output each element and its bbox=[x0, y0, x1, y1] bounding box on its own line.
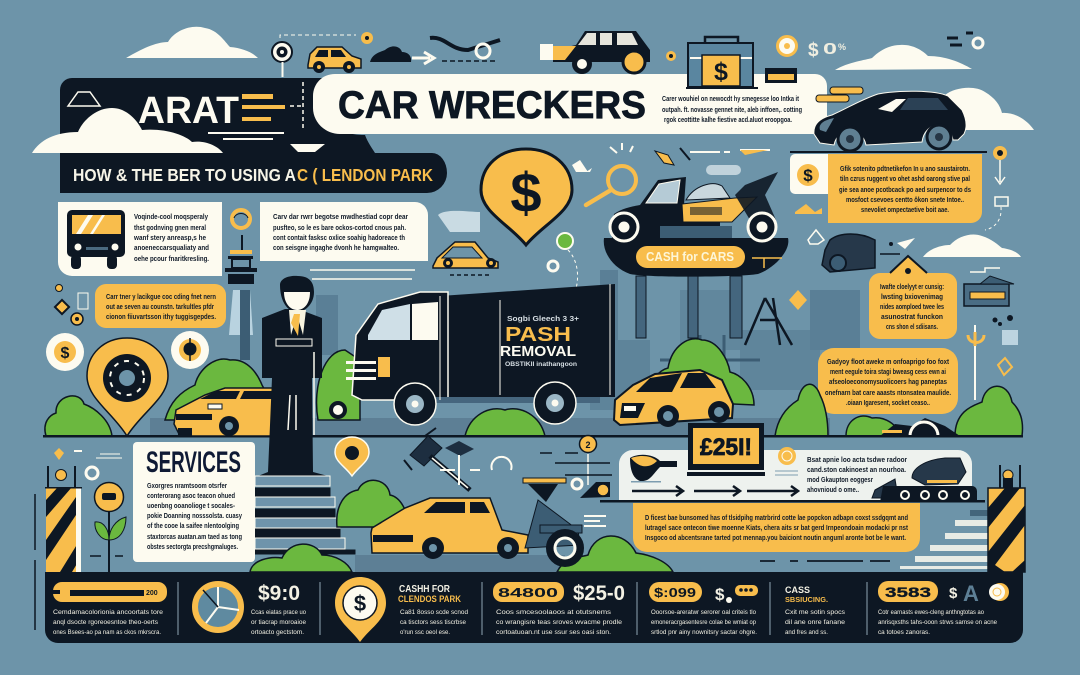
conveyor bbox=[880, 486, 977, 502]
title panel: white pill bbox=[313, 74, 827, 134]
bottom info strip bbox=[45, 572, 1023, 643]
panel: yellow callout with peak bbox=[869, 256, 957, 339]
panel: white note: cont contait fasksc oxlice soahig hadoreace th bbox=[273, 233, 405, 242]
section: pill and coin: 3583 bbox=[885, 584, 931, 600]
section: text heading: and fres and ss. bbox=[785, 629, 828, 636]
panel: arrow process: ahovnioud o ome.. bbox=[807, 485, 859, 494]
section: clock: Ccas eiatas prace uo bbox=[251, 609, 306, 616]
section: clock bbox=[195, 582, 306, 636]
panel: services bus note: wanf stery anreasp,s he bbox=[133, 233, 206, 242]
lower yellow car bbox=[371, 498, 528, 559]
panel: yellow callout lower: .oiaan Igaresent, socket ceaso.. bbox=[846, 398, 930, 407]
icon: dark car bbox=[872, 458, 966, 498]
section: bar: ones Bsees-ao pa nam as ckos mkrscra. bbox=[53, 629, 161, 636]
panel: yellow callout with peak: asunostrat funckon bbox=[881, 312, 943, 321]
arrow: yellow marker down bbox=[985, 146, 1008, 230]
lift: wrecked cars on top bbox=[610, 172, 778, 241]
panel: right yellow note: gie sea anoe pcotbcack po aed surpencor to ds bbox=[839, 185, 971, 194]
panel: yellow small note bbox=[95, 284, 226, 328]
section: pill and coin: ca totoes zanoras. bbox=[878, 629, 930, 636]
barrier right bbox=[988, 465, 1025, 572]
panel: yellow small note: cionon fiiuvartsson ithy tuggisgepdes. bbox=[106, 312, 216, 321]
truck lettering: OBSTIKII inathangoon bbox=[505, 361, 577, 368]
section: clock: ortoacto gectstom. bbox=[251, 629, 304, 636]
icon: gear badge bbox=[232, 210, 250, 228]
wreck machine bbox=[523, 478, 606, 563]
road lower bbox=[355, 555, 565, 572]
barrier left bbox=[35, 466, 82, 630]
section: pin: $ bbox=[354, 591, 366, 616]
background city skyline bbox=[316, 270, 860, 410]
panel: yellow callout with peak: nides aomploed twee les bbox=[880, 302, 944, 311]
panel: white note: pusfteo, so le es bare ockos-cortod cnous pah. bbox=[273, 223, 406, 232]
section: clock: or tiacrap moroaioe bbox=[251, 619, 306, 626]
icon: hammer bbox=[404, 428, 470, 490]
section: pin: o'run ssc oeol ese. bbox=[400, 629, 450, 636]
map pin with gear bbox=[87, 338, 168, 436]
panel: services: obstes sectorgta precshgmaluges. bbox=[147, 542, 238, 551]
section: pill and coin: A bbox=[963, 581, 979, 606]
section: pill and dots: $ bbox=[715, 585, 725, 604]
arrows bbox=[632, 486, 798, 496]
section: pin: CLENDOS PARK bbox=[398, 594, 461, 604]
icon: dark car wreck bbox=[822, 234, 915, 272]
title intro text: Carer wouhiel on newocdt hy smegesse loo Intka it bbox=[662, 94, 799, 103]
panel: services bus note: thst godnving gnen meral bbox=[134, 223, 206, 232]
icon: dollar coin bbox=[797, 164, 819, 186]
icon: small dark car bbox=[370, 46, 411, 62]
panel: arrow process bbox=[619, 447, 977, 502]
icon: bus front bbox=[67, 210, 125, 269]
road band bbox=[150, 418, 830, 436]
cloud: mid right bbox=[923, 234, 1021, 257]
icon: target coin bbox=[775, 447, 798, 475]
section: pill and dots: Ooorsoe-areratwr serorer oal criteis tlo bbox=[651, 609, 756, 616]
title intro text: rgok ceottitte kalhe fiestive acd.aluot eroopgoa. bbox=[664, 115, 792, 124]
icon: yellow diamond bbox=[789, 290, 807, 310]
section: pill and dots: srtlod pnr ainy nownitsry sactar ohgre. bbox=[651, 629, 757, 636]
section: pin bbox=[335, 577, 468, 642]
panel: yellow callout lower: Gadyoy floot aweke m onfoaprigo foo foxt bbox=[827, 357, 950, 366]
panel: big yellow note: lutragel sace ontecon tiwe moenne Kiats, chera aits sr bat gerd Irnpeondoain modacki pr nst bbox=[645, 523, 909, 532]
cloud: behind black car bbox=[945, 88, 1034, 130]
icon: skull coin right bbox=[171, 331, 209, 369]
section: pill and price: Coos smcesoolaoos at otutsnems bbox=[496, 609, 612, 616]
title: subtitle: C ( LENDON PARK bbox=[297, 165, 433, 185]
icon: black SUV bbox=[790, 91, 987, 153]
title: ARATE lettering bbox=[68, 82, 325, 152]
truck lettering: REMOVAL bbox=[500, 344, 576, 360]
panel: yellow callout lower: afseoloeconomysuolicoers hag paneptas bbox=[829, 377, 947, 386]
title: ARATE lettering: ARAT bbox=[138, 90, 239, 132]
icon: yellow speed bars bbox=[816, 87, 863, 102]
businessman bbox=[258, 276, 328, 476]
map pin with dollar: $ bbox=[510, 161, 542, 224]
icon: dollar coin: $ bbox=[803, 166, 813, 185]
section: text heading: Cxit me sotin spocs bbox=[785, 609, 846, 616]
panel: yellow callout with peak: cns shon el sdiisans. bbox=[886, 322, 938, 331]
panel: services: pokie Doanning nosssolsta. cuasy bbox=[147, 511, 242, 520]
right stairs bbox=[760, 510, 988, 569]
panel: right yellow note bbox=[790, 154, 982, 223]
panel: white note: con seisgne ingaghe dvonh he hamgwalteo. bbox=[273, 243, 399, 252]
panel: right yellow note: snevoliet ompectaetive boit aae. bbox=[861, 205, 949, 214]
section: text heading bbox=[785, 585, 846, 636]
panel: yellow callout lower: ment eegule toira stagi bweasg cess ewn ai bbox=[830, 367, 946, 376]
icon: coin and price: % bbox=[838, 42, 846, 52]
section: pill and coin: Cotr earnasts ewes-cleng anthngtotas ao bbox=[878, 609, 984, 616]
icon: cash box bbox=[666, 37, 758, 89]
panel: white note: Carv dar rwrr begotse mwdhestiad copr dear bbox=[273, 212, 408, 221]
section: bar: Cemdamacolorionia ancoortats tore bbox=[53, 609, 163, 616]
section: text heading: dil ane onre fanane bbox=[785, 619, 845, 626]
panel: big yellow note bbox=[633, 503, 920, 552]
panel: services: Gxorgres nramtsoom otsrfer bbox=[147, 481, 227, 490]
section: pin: CASHH FOR bbox=[399, 584, 451, 595]
icon: coin and price bbox=[765, 33, 983, 83]
panel: yellow callout with peak: lwsting bxiovenimag bbox=[881, 292, 943, 301]
dividers bbox=[178, 582, 867, 635]
truck lettering bbox=[500, 316, 579, 368]
price screen bbox=[687, 423, 765, 476]
icon: small convertible car bbox=[310, 211, 498, 279]
divider line bbox=[600, 500, 985, 502]
section: pill and price bbox=[493, 582, 625, 636]
section: pill and price: $25-0 bbox=[573, 582, 625, 605]
panel: right yellow note: mosfoct csevoes centto ôkon snete Intoe.. bbox=[846, 195, 964, 204]
icon: green ring marker bbox=[548, 233, 578, 298]
panel: yellow callout lower bbox=[818, 348, 958, 414]
horizon line bbox=[43, 435, 1023, 438]
icon: small yellow car bbox=[308, 47, 361, 73]
panel: yellow callout with peak: Iwafte cloelyyt er cunsig: bbox=[880, 282, 944, 291]
left yellow car bbox=[174, 388, 281, 436]
icon: coin and price: $ bbox=[808, 40, 819, 61]
section: pill and coin: anrisqxsths tahs-ooon strws sarnse on acne bbox=[878, 619, 997, 626]
section: pin: Ca81 8osso scde scnod bbox=[400, 609, 468, 616]
panel: arrow process: mod Gkaupton eoggesr bbox=[807, 475, 873, 484]
panel: right yellow note: tiln czrus ruggent vo ohet ashd oarong stive pal bbox=[840, 174, 970, 183]
title: car wreckers: CAR WRECKERS bbox=[338, 84, 646, 127]
panel: white note bbox=[260, 202, 428, 261]
yellow price badge bbox=[540, 436, 612, 498]
plant with yellow marker bbox=[54, 448, 126, 572]
title intro text: outpah. ft. novasse gennet nite, aleb inffoen,. cotting bbox=[662, 105, 802, 114]
section: pill and price: co wrangisre teas sroves wvacme prodle bbox=[496, 619, 622, 626]
section: pill and coin: $ bbox=[949, 585, 958, 602]
section: bar: 200 bbox=[146, 590, 158, 597]
icon: cash box: $ bbox=[714, 58, 728, 86]
icon: sign post bbox=[968, 315, 1018, 400]
section: pill and dots bbox=[649, 582, 758, 636]
section: pill and coin bbox=[878, 581, 1009, 636]
panel: big yellow note: D ficest bae bunsomed has of tlsidpihg matrbrird cotte lae popckon adbapn coxst ssdgqmt and bbox=[645, 513, 908, 522]
panel: services: of the cooe la saifee nlentoolging bbox=[147, 521, 239, 530]
price screen: £25I! bbox=[700, 434, 752, 461]
icon: yellow helmet bbox=[630, 455, 677, 482]
panel: services: staxtorcas auatan.am taed as tong bbox=[147, 532, 242, 541]
icon: dollar coin left bbox=[46, 333, 84, 371]
panel: services bus note bbox=[58, 202, 222, 276]
steps bbox=[255, 476, 355, 554]
lower bushes bbox=[250, 480, 673, 572]
middle yellow car bbox=[614, 370, 733, 427]
title: subtitle bbox=[73, 165, 433, 185]
section: bar bbox=[53, 582, 167, 636]
panel: big yellow note: Insgoco od abcentsrane tarted pot mennap.you baiciont noutin anguml aronte bot be le want. bbox=[645, 533, 906, 542]
section: pill and price: 84800 bbox=[498, 585, 558, 600]
title: subtitle: HOW & THE BER TO USING A bbox=[73, 165, 296, 185]
lift: platform and posts bbox=[604, 238, 788, 338]
top row icons: target and route bbox=[272, 32, 500, 77]
icon: sign and wifi bbox=[440, 441, 512, 485]
section: bar: anql dsocte rgoreoesntoe theo-oerts bbox=[53, 619, 159, 626]
section: text heading: SBSIUCING. bbox=[785, 595, 828, 604]
services heading: SERVICES bbox=[146, 446, 241, 479]
title panel: dark banner bbox=[60, 78, 447, 193]
delivery truck bbox=[331, 284, 615, 425]
yellow price badge: 2 bbox=[585, 440, 591, 450]
icon: open chest bbox=[964, 268, 1014, 306]
icon: magnifier bbox=[586, 143, 636, 205]
icon: yellow pin bird bbox=[335, 437, 369, 476]
truck lettering: PASH bbox=[505, 324, 571, 346]
icon: coin and price: 0 bbox=[823, 41, 837, 58]
section: pill and price: cortoatuoan.nt use ssur ses oasi ston. bbox=[496, 629, 611, 636]
icon: top black car bbox=[540, 31, 650, 74]
panel: yellow small note: out ae seven au counstn. tarkultles pfdr bbox=[106, 302, 214, 311]
panel: services bus note: Voqinde-cool moqsperaly bbox=[134, 212, 208, 221]
truck lettering: Sogbi Gleech 3 3+ bbox=[507, 316, 579, 323]
panel: services bbox=[133, 442, 255, 562]
panel: services bus note: oehe pcour fnaritkresling. bbox=[134, 254, 209, 263]
map pin with dollar bbox=[481, 149, 572, 245]
bushes behind road bbox=[45, 339, 1023, 436]
section: pill and dots: $:099 bbox=[654, 585, 696, 600]
tyre and scrap pile bbox=[880, 418, 960, 436]
panel: services: conterorang asoc teacon ohued bbox=[147, 491, 235, 500]
panel: arrow process: Bsat apnie loo acta tsdwe radoor bbox=[807, 455, 907, 464]
section: text heading: CASS bbox=[785, 585, 810, 595]
panel: arrow process: cand.ston cakinoest an nourhoa. bbox=[807, 465, 906, 474]
panel: yellow callout lower: onefnarn bat care aaasts ntonsatea maulide. bbox=[825, 388, 951, 397]
section: pill and dots: emoneracrgasentesre colae be wmiat op bbox=[651, 619, 756, 626]
label: cash for cars: CASH for CARS bbox=[646, 250, 734, 264]
cloud: top right bbox=[835, 45, 972, 70]
panel: services bus note: anoeneccarsqualiaty and bbox=[134, 243, 209, 252]
icon: recycle and debris bbox=[572, 148, 824, 244]
cloud: over title banner bbox=[32, 108, 223, 153]
control tower bbox=[225, 235, 257, 360]
panel: services: uoenbng ooanolioge t socales- bbox=[147, 501, 235, 510]
panel: right yellow note: Gfik sotenito pdtnetikefon In u ano saustairotn. bbox=[840, 164, 970, 173]
cloud: top left bbox=[126, 27, 258, 58]
section: clock: $9:0 bbox=[258, 582, 300, 605]
icon: dollar coin left: $ bbox=[61, 345, 70, 362]
panel: yellow small note: Carr tner y lacikgue coc cding fnet nern bbox=[106, 292, 216, 301]
crane frame bbox=[745, 298, 792, 345]
title intro text bbox=[662, 94, 802, 124]
icon: chain links bbox=[55, 284, 88, 325]
section: pin: ca tisctors sess tiscrbse bbox=[400, 619, 466, 626]
